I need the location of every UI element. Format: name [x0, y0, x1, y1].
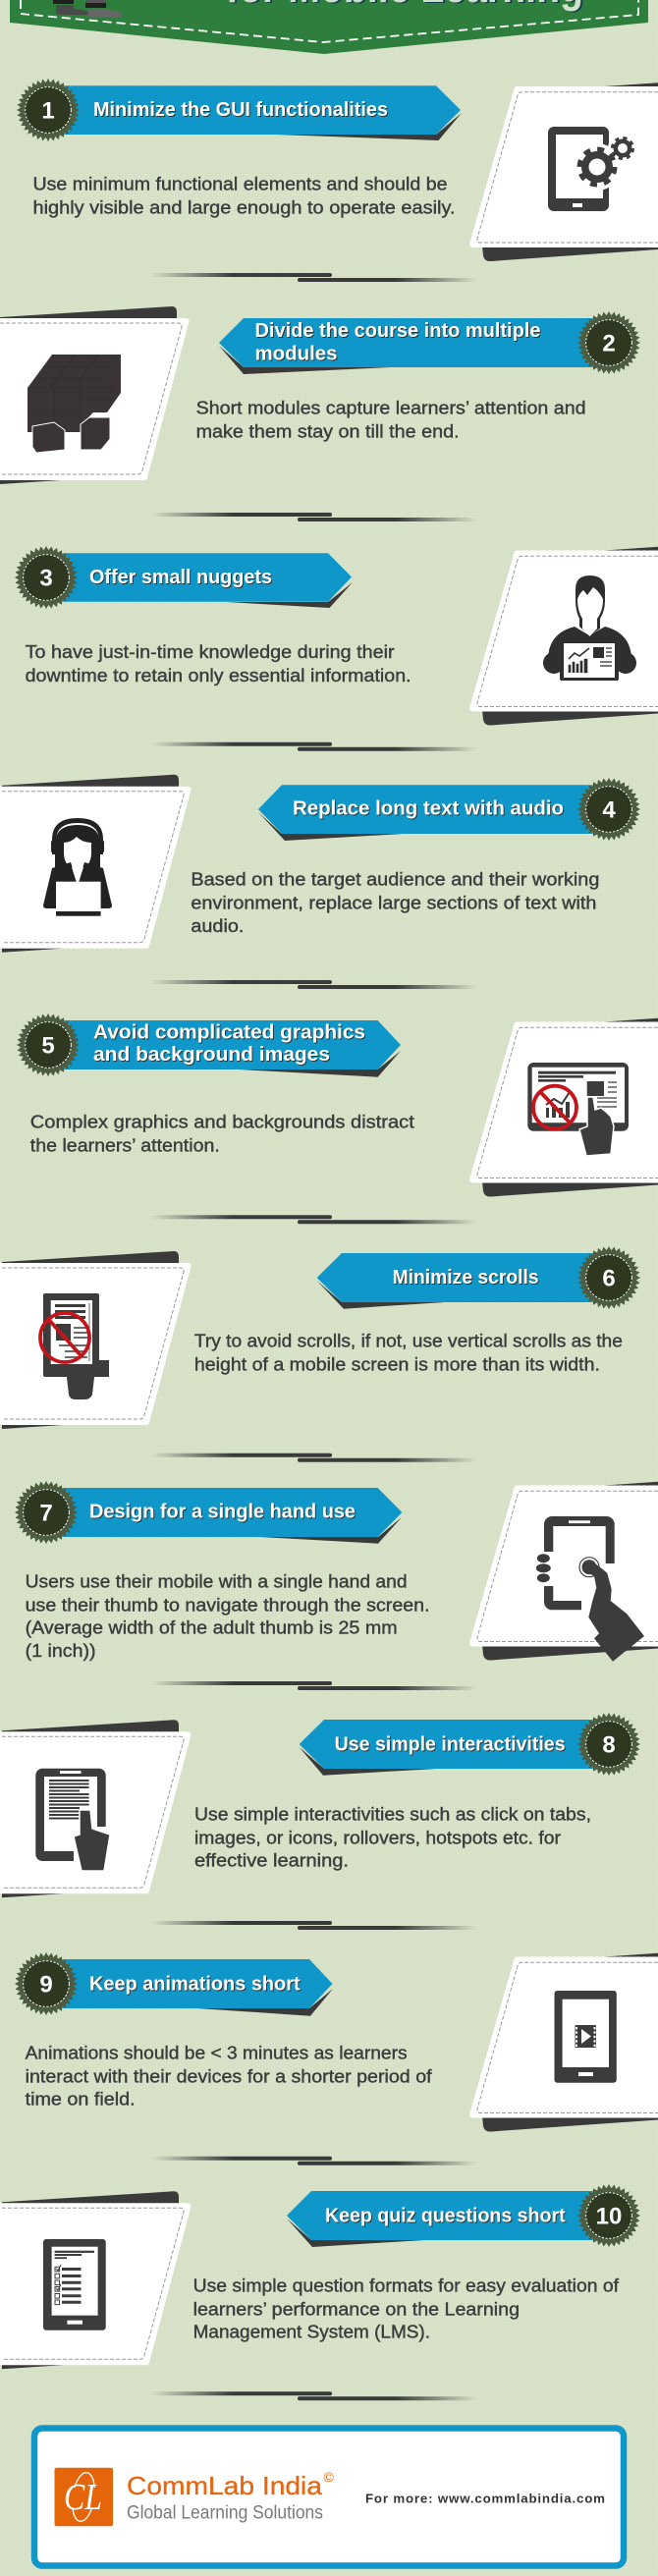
- ribbon 5: and background images: [93, 1043, 330, 1066]
- tagline: Global Learning Solutions: [127, 2502, 323, 2523]
- text 3: [26, 642, 411, 685]
- divider 3: [151, 742, 476, 751]
- ribbon 3: Offer small nuggets: [89, 566, 272, 588]
- text 8: Use simple interactivities such as click on tabs,: [194, 1804, 591, 1824]
- divider 4: [151, 980, 476, 989]
- panel 3: [472, 547, 658, 726]
- text 4: Based on the target audience and their working: [191, 870, 599, 890]
- section 1: [17, 79, 658, 261]
- badge 3: [15, 546, 78, 609]
- company name: CommLab India: [127, 2471, 323, 2500]
- section 7: [15, 1481, 658, 1662]
- panel 1: [472, 82, 658, 261]
- text 10: Management System (LMS).: [193, 2323, 430, 2342]
- ribbon 1: [48, 85, 462, 140]
- text 9: time on field.: [26, 2089, 136, 2109]
- text 8: images, or icons, rollovers, hotspots etc. for: [194, 1828, 561, 1847]
- ribbon 2: [219, 318, 609, 374]
- text 2: Short modules capture learners’ attention and: [196, 399, 586, 418]
- divider 5: [151, 1215, 476, 1224]
- section 10: [0, 2184, 640, 2369]
- ribbon 4: [258, 785, 609, 841]
- panel 10: [0, 2191, 189, 2369]
- section 6: [0, 1246, 640, 1429]
- section 5: [17, 1014, 658, 1197]
- badge 8: 8: [602, 1732, 616, 1758]
- icon: tablet with no-graphics sign: [527, 1063, 629, 1156]
- panel 8: [0, 1720, 189, 1897]
- ribbon 8: [300, 1720, 609, 1776]
- text 1: [33, 175, 456, 218]
- badge 10: 10: [596, 2204, 622, 2229]
- badge 1: 1: [41, 98, 55, 124]
- ribbon 2: modules: [255, 342, 338, 365]
- badge 1: [17, 79, 80, 141]
- ribbon 5: [48, 1020, 401, 1077]
- ribbon 2: Divide the course into multiple: [255, 319, 540, 342]
- text 5: the learners’ attention.: [30, 1135, 220, 1155]
- badge 2: 2: [602, 330, 616, 357]
- website: For more: www.commlabindia.com: [365, 2492, 605, 2506]
- divider 2: [151, 513, 476, 521]
- text 3: To have just-in-time knowledge during their: [26, 642, 395, 662]
- badge 4: 4: [602, 797, 616, 823]
- panel 7: [472, 1482, 658, 1661]
- badge 7: [15, 1481, 78, 1544]
- badge 4: [577, 778, 640, 841]
- text 9: Animations should be < 3 minutes as learners: [26, 2044, 408, 2063]
- icon: phone with quiz: [43, 2239, 106, 2330]
- ribbon 3: [46, 553, 353, 608]
- icon: boots: [53, 0, 123, 18]
- icon: phone with no-scroll sign: [40, 1293, 109, 1399]
- divider 8: [151, 1921, 476, 1930]
- text 7: use their thumb to navigate through the screen.: [26, 1596, 430, 1616]
- footer panel: [34, 2428, 624, 2565]
- text 8: effective learning.: [194, 1851, 349, 1871]
- text 5: Complex graphics and backgrounds distract: [30, 1112, 414, 1131]
- badge 5: [17, 1014, 80, 1076]
- icon: cubes: [27, 355, 121, 453]
- ribbon 9: Keep animations short: [89, 1973, 301, 1996]
- badge 5: 5: [41, 1033, 55, 1059]
- divider 1: [151, 273, 476, 282]
- text 1: Use minimum functional elements and should be: [33, 175, 448, 194]
- divider 9: [151, 2157, 476, 2165]
- badge 9: 9: [39, 1972, 53, 1998]
- badge 2: [577, 311, 640, 374]
- icon: phone with gears: [548, 127, 639, 211]
- badge 3: 3: [39, 566, 53, 591]
- section 3: [15, 546, 658, 726]
- ribbon 9: [46, 1959, 333, 2016]
- text 7: (1 inch)): [26, 1641, 96, 1661]
- panel 2: [0, 306, 187, 484]
- section 9: [15, 1952, 658, 2132]
- text 4: audio.: [191, 916, 244, 936]
- icon: person with chart: [543, 575, 636, 681]
- ribbon 7: Design for a single hand use: [89, 1501, 356, 1523]
- badge 6: [577, 1246, 640, 1309]
- icon: phone with video: [554, 1991, 617, 2083]
- text 6: Try to avoid scrolls, if not, use vertical scrolls as the: [194, 1332, 623, 1351]
- text 3: downtime to retain only essential information.: [26, 666, 411, 685]
- ribbon 5: Avoid complicated graphics: [93, 1020, 365, 1043]
- text 9: [26, 2044, 433, 2109]
- divider 6: [151, 1453, 476, 1462]
- copyright mark: ©: [324, 2469, 334, 2485]
- text 7: [26, 1572, 430, 1661]
- text 4: environment, replace large sections of text with: [191, 894, 596, 913]
- text 10: Use simple question formats for easy evaluation of: [193, 2275, 620, 2295]
- ribbon 4: Replace long text with audio: [293, 797, 564, 819]
- logo: CL mark: [55, 2468, 113, 2526]
- ribbon 6: Minimize scrolls: [393, 1266, 539, 1288]
- ribbon 6: [317, 1253, 609, 1309]
- text 6: height of a mobile screen is more than its width.: [194, 1355, 600, 1375]
- ribbon 10: [287, 2191, 609, 2247]
- text 10: [193, 2275, 620, 2342]
- logo: CL mark: CL: [64, 2477, 102, 2518]
- text 5: [30, 1112, 414, 1155]
- badge 7: 7: [39, 1501, 53, 1526]
- badge 8: [577, 1713, 640, 1776]
- text 2: make them stay on till the end.: [196, 422, 460, 442]
- ribbon 8: Use simple interactivities: [335, 1732, 566, 1755]
- text 10: learners’ performance on the Learning: [193, 2299, 520, 2319]
- title banner: [10, 0, 648, 54]
- divider 7: [151, 1681, 476, 1690]
- text 7: (Average width of the adult thumb is 25 mm: [26, 1618, 398, 1638]
- text 2: [196, 399, 586, 442]
- ribbon 10: Keep quiz questions short: [325, 2204, 566, 2226]
- icon: finger tapping phone: [35, 1769, 110, 1871]
- text 8: [194, 1804, 591, 1871]
- panel 9: [472, 1953, 658, 2132]
- text 1: highly visible and large enough to operate easily.: [33, 198, 456, 218]
- badge 9: [15, 1952, 78, 2015]
- ribbon 1: Minimize the GUI functionalities: [93, 98, 388, 121]
- icon: hand holding phone: [536, 1516, 644, 1662]
- icon: woman with headset and laptop: [43, 818, 112, 916]
- section 8: [0, 1713, 640, 1897]
- text 9: interact with their devices for a shorter period of: [26, 2067, 433, 2087]
- text 7: Users use their mobile with a single hand and: [26, 1572, 408, 1592]
- text 4: [191, 870, 599, 936]
- panel 6: [0, 1251, 189, 1429]
- ribbon 7: [46, 1488, 402, 1544]
- panel 4: [0, 775, 189, 953]
- section 2: [0, 306, 640, 484]
- badge 10: [577, 2184, 640, 2247]
- section 4: [0, 775, 640, 953]
- panel 5: [472, 1018, 658, 1197]
- text 6: [194, 1332, 623, 1375]
- badge 6: 6: [602, 1265, 616, 1292]
- divider 10: [151, 2391, 476, 2400]
